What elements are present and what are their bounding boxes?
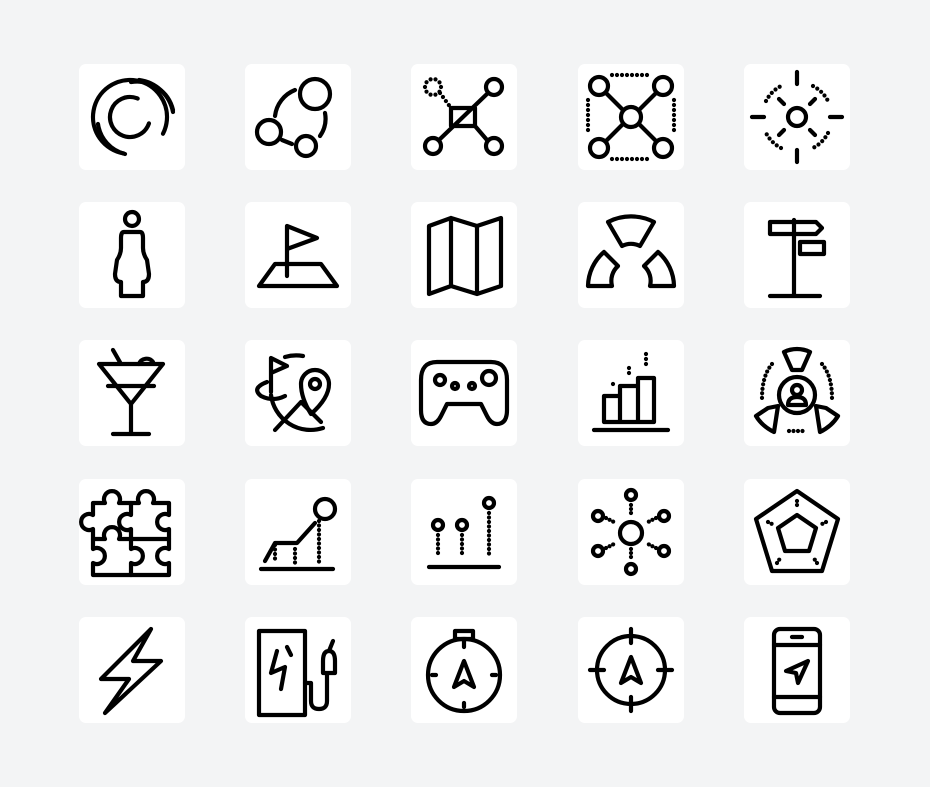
tile: crosshair sun [744,64,850,170]
tile: pentagon [744,479,850,585]
tile: signpost [744,202,850,308]
tile: phone navigation [744,617,850,723]
tile: puzzle [79,479,185,585]
tile: line chart [245,479,351,585]
tile: lollipop chart [411,479,517,585]
tile: hub six [578,479,684,585]
tile: hub corners [578,64,684,170]
tile: bar chart [578,340,684,446]
tile: three circles [245,64,351,170]
tile: crosshair arrow [578,617,684,723]
tile: globe with pin [245,340,351,446]
tile: stopwatch compass [411,617,517,723]
tile: gamepad [411,340,517,446]
tile: radiation [578,202,684,308]
tile: person circle sectors [744,340,850,446]
tile: network square [411,64,517,170]
tile: concentric arcs [79,64,185,170]
tile: cocktail [79,340,185,446]
tile: lightning [79,617,185,723]
tile: EV charger [245,617,351,723]
tile: folded map [411,202,517,308]
tile: woman [79,202,185,308]
tile: flag on field [245,202,351,308]
